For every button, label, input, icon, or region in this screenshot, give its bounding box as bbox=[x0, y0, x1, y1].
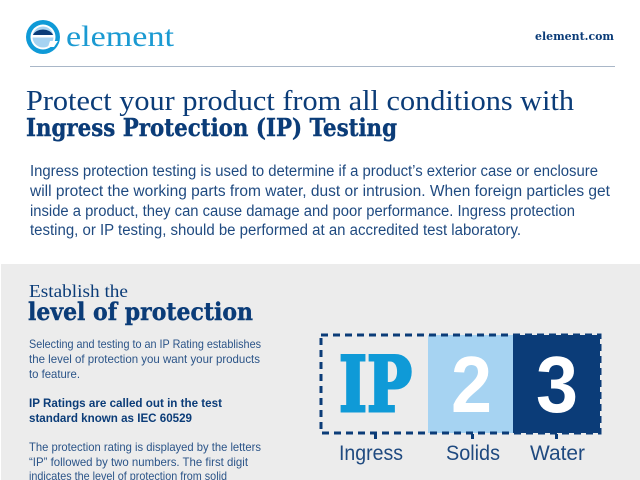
dashed outline bbox=[321, 335, 600, 433]
title: Protect your product from all conditions with bbox=[26, 85, 575, 117]
label: Solids: Solids bbox=[446, 442, 500, 465]
section heading: level of protection bbox=[28, 297, 253, 326]
icon: logo ring bbox=[26, 20, 60, 54]
logo wordmark: element bbox=[66, 20, 175, 53]
solids box bbox=[428, 335, 513, 433]
label: Ingress: Ingress bbox=[339, 442, 403, 465]
intro paragraph: inside a product, they can cause damage and poor performance. Ingress protection bbox=[30, 203, 575, 220]
digit 3: 3 bbox=[536, 340, 578, 429]
body text: level of protection bbox=[29, 337, 261, 480]
title bbox=[26, 85, 575, 142]
website link: element.com bbox=[535, 30, 614, 43]
body text: level of protection: “IP” followed by two numbers. The first digit bbox=[29, 455, 249, 469]
intro paragraph: Ingress protection testing is used to determine if a product’s exterior case or enclosure bbox=[30, 163, 598, 180]
diagram: IP rating code bbox=[321, 335, 600, 465]
body text: level of protection: Selecting and testing to an IP Rating establishes bbox=[29, 337, 261, 351]
intro paragraph: testing, or IP testing, should be performed at an accredited test laboratory. bbox=[30, 222, 521, 239]
body text: level of protection: IP Ratings are called out in the test bbox=[29, 396, 222, 410]
body text: level of protection: the level of protection you want your products bbox=[29, 352, 260, 366]
intro paragraph: will protect the working parts from water, dust or intrusion. When foreign particles get bbox=[29, 183, 611, 200]
body text: level of protection: to feature. bbox=[29, 367, 80, 381]
intro paragraph bbox=[29, 163, 611, 239]
logo: element bbox=[26, 20, 175, 54]
header rule bbox=[30, 66, 615, 67]
digit 2: 2 bbox=[451, 340, 492, 429]
IP letters: IP bbox=[339, 340, 412, 429]
panel: level of protection bbox=[1, 264, 640, 480]
label: Water: Water bbox=[530, 442, 585, 465]
section heading bbox=[28, 281, 253, 326]
body text: level of protection: standard known as IEC 60529 bbox=[29, 411, 192, 425]
water box bbox=[513, 335, 600, 433]
body text: level of protection: The protection rating is displayed by the letters bbox=[29, 440, 261, 454]
title: Ingress Protection (IP) Testing bbox=[26, 113, 397, 142]
section heading: Establish the bbox=[29, 281, 128, 301]
tick marks bbox=[374, 434, 558, 439]
